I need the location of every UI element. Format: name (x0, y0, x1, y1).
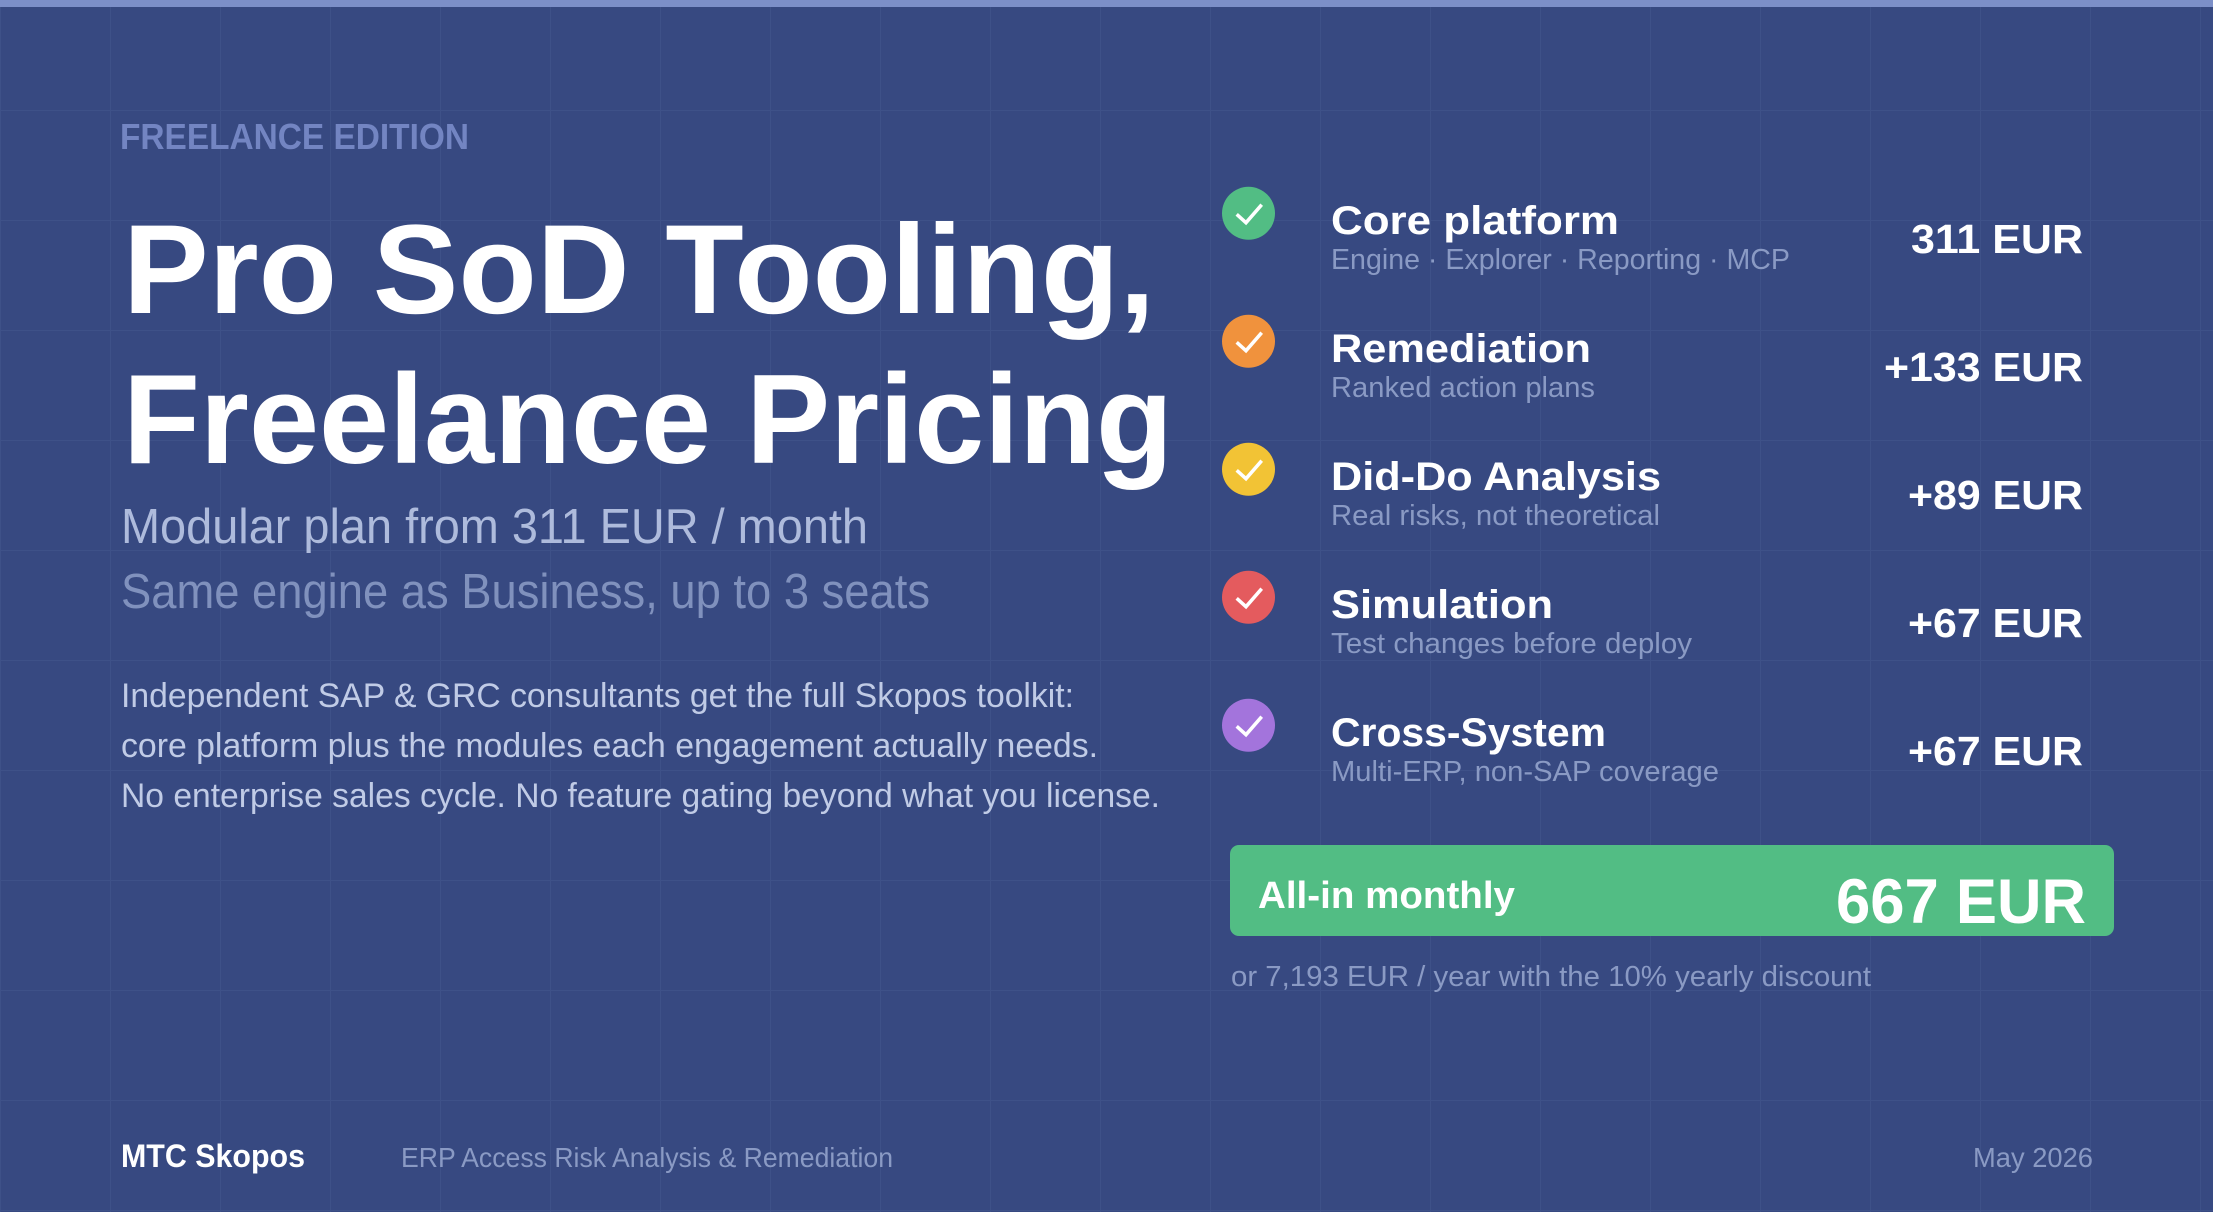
item description: Engine · Explorer · Reporting · MCP (1331, 244, 1790, 276)
icon: green check (1222, 187, 1275, 240)
icon: yellow check (1222, 443, 1275, 496)
pricing rows (1222, 187, 2083, 788)
total price: 667 EUR (1836, 867, 2086, 937)
icon: red check (1222, 571, 1275, 624)
item price: +89 EUR (1908, 472, 2083, 518)
item price: +67 EUR (1908, 600, 2083, 646)
item description: Test changes before deploy (1331, 628, 1693, 660)
item name: Simulation (1331, 583, 1553, 627)
item description: Multi-ERP, non-SAP coverage (1331, 756, 1719, 788)
row: cross-system (1222, 699, 2083, 788)
subtitle: Same engine as Business, up to 3 seats (121, 565, 930, 619)
title: Pro SoD Tooling, (123, 198, 1155, 340)
description text block: core platform plus the modules each engagement actually needs. (121, 727, 1098, 765)
item description: Real risks, not theoretical (1331, 500, 1660, 532)
footer date: May 2026 (1973, 1142, 2093, 1173)
yearly discount note: or 7,193 EUR / year with the 10% yearly discount (1231, 961, 1871, 993)
title (123, 198, 1173, 490)
icon: purple check (1222, 699, 1275, 752)
subtitle (121, 500, 930, 619)
footer (121, 1138, 2093, 1174)
row: simulation (1222, 571, 2083, 660)
top accent bar (0, 0, 2213, 7)
icon: orange check (1222, 315, 1275, 368)
description text block: No enterprise sales cycle. No feature gating beyond what you license. (121, 777, 1160, 815)
row: core platform (1222, 187, 2083, 276)
item name: Remediation (1331, 327, 1591, 371)
footer tagline: ERP Access Risk Analysis & Remediation (401, 1142, 893, 1173)
total bar (1230, 845, 2114, 937)
footer brand: MTC Skopos (121, 1138, 305, 1174)
item name: Core platform (1331, 199, 1619, 243)
total label: All-in monthly (1258, 875, 1515, 917)
title: Freelance Pricing (123, 348, 1173, 490)
item price: +67 EUR (1908, 728, 2083, 774)
item price: +133 EUR (1884, 344, 2083, 390)
item price: 311 EUR (1911, 216, 2083, 262)
item name: Did-Do Analysis (1331, 455, 1661, 499)
eyebrow label: FREELANCE EDITION (120, 116, 469, 157)
row: did-do analysis (1222, 443, 2083, 532)
description text block: Independent SAP & GRC consultants get the full Skopos toolkit: (121, 677, 1074, 715)
item name: Cross-System (1331, 711, 1606, 755)
row: remediation (1222, 315, 2083, 404)
description text block (121, 677, 1160, 815)
item description: Ranked action plans (1331, 372, 1595, 404)
subtitle: Modular plan from 311 EUR / month (121, 500, 868, 554)
